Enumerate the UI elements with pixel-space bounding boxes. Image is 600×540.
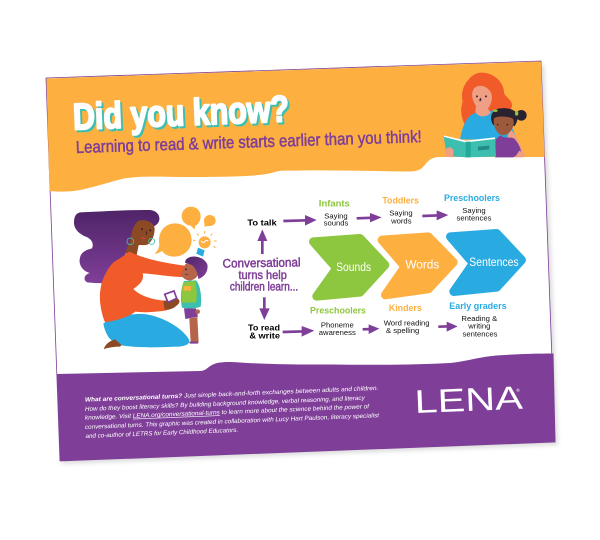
boy foot xyxy=(189,342,198,344)
book xyxy=(444,135,496,157)
speech bubble small xyxy=(204,215,216,227)
arrows xyxy=(257,210,458,337)
child hand xyxy=(515,151,525,157)
top row stages: Preschoolers xyxy=(444,193,500,203)
bottom row descriptions xyxy=(319,314,498,339)
page shadow xyxy=(49,65,558,464)
woman neck and face xyxy=(125,220,155,255)
boy hair xyxy=(185,257,208,279)
footer text: What are conversational turns? Just simple back-and-forth exchanges between adults and children. xyxy=(85,385,378,404)
woman hair xyxy=(74,210,159,283)
top row descriptions xyxy=(324,206,492,228)
chevron: sounds xyxy=(313,238,385,296)
footer text xyxy=(85,385,379,440)
top row descriptions: Saying xyxy=(324,211,348,220)
illustration: woman and boy xyxy=(74,207,217,349)
woman facial features xyxy=(141,228,151,235)
woman hand and phone xyxy=(163,291,179,310)
logo: LENA: ® xyxy=(516,387,520,393)
panel: orange header xyxy=(46,62,545,192)
chevron: sentences: Sentences xyxy=(469,255,519,269)
woman foot xyxy=(104,339,122,349)
footer text: and co-author of LETRS for Early Childhood Educators. xyxy=(85,427,238,440)
child head and hair xyxy=(491,108,527,135)
illustration: mother and child reading xyxy=(444,73,527,157)
label: to read and write: & write xyxy=(249,330,280,340)
boy face features xyxy=(185,268,188,275)
chevron: words: Words xyxy=(405,257,439,271)
logo: LENA: LENA xyxy=(414,379,524,420)
bottom row descriptions: writing xyxy=(467,322,490,331)
footer text: conversational turns. This graphic was created in collaboration with Lucy Hart Paulson, literacy specialist xyxy=(85,412,379,431)
mother arm xyxy=(507,128,525,157)
subtitle: Learning to read & write starts earlier than you think! xyxy=(76,127,422,157)
chevron: sounds: Sounds xyxy=(336,260,371,274)
mother neck and face xyxy=(472,86,492,116)
top row stages: Toddlers xyxy=(382,196,419,206)
earrings xyxy=(127,238,155,245)
top row stages: Infants xyxy=(319,198,350,208)
central label: turns help xyxy=(238,268,287,282)
boy head xyxy=(181,264,200,281)
speech bubble medium xyxy=(182,207,201,230)
mother facial features xyxy=(476,95,487,102)
diagram: conversational turns xyxy=(222,193,522,340)
central label xyxy=(222,255,301,293)
woman legs xyxy=(103,314,189,347)
top row descriptions: Saying xyxy=(389,209,413,218)
child shirt xyxy=(495,135,521,157)
bottom row descriptions: Phoneme xyxy=(321,321,354,330)
boy body xyxy=(181,280,201,309)
bottom row descriptions: Word reading xyxy=(384,318,430,327)
woman smile xyxy=(141,237,145,238)
title: Did you know? xyxy=(72,88,290,137)
top row descriptions: Saying xyxy=(462,206,486,215)
woman torso xyxy=(100,252,185,322)
mother hand xyxy=(445,147,454,157)
boy hand xyxy=(195,309,200,314)
chevron: words xyxy=(382,237,453,295)
footer text: knowledge. Visit LENA.org/conversational-turns to learn more about the science behind the power of xyxy=(85,403,370,422)
boy legs xyxy=(189,317,199,342)
mother hair xyxy=(461,73,512,128)
label: to talk: To talk xyxy=(247,217,277,227)
top row descriptions: sentences xyxy=(457,214,492,223)
boy shorts xyxy=(184,308,198,319)
bottom row descriptions: sentences xyxy=(463,330,498,339)
bottom row descriptions: awareness xyxy=(319,328,356,337)
bottom row descriptions: Reading & xyxy=(461,314,497,323)
speech bubble large xyxy=(155,223,192,257)
bottom row stages: Preschoolers xyxy=(310,306,366,316)
top row stages xyxy=(319,193,500,208)
footer text: How do they boost literacy skills? By building background knowledge, verbal reasoning, and literacy xyxy=(85,395,366,413)
mother body xyxy=(460,111,517,140)
central label: children learn... xyxy=(230,279,298,293)
bottom row descriptions: & spelling xyxy=(386,326,419,335)
bottom row stages: Early graders xyxy=(449,301,507,311)
panel: sheet xyxy=(46,61,555,461)
label: to read and write xyxy=(248,323,280,340)
bottom row stages: Kinders xyxy=(389,303,422,313)
bottom row stages xyxy=(310,301,507,316)
label: to read and write: To read xyxy=(248,323,280,333)
central label: Conversational xyxy=(222,255,301,271)
chevron: sentences xyxy=(450,233,522,292)
panel: purple footer xyxy=(57,354,556,461)
title: Did you know? xyxy=(74,90,292,139)
top row descriptions: words xyxy=(390,216,412,225)
light bulb xyxy=(193,231,217,257)
top row descriptions: sounds xyxy=(324,219,348,228)
